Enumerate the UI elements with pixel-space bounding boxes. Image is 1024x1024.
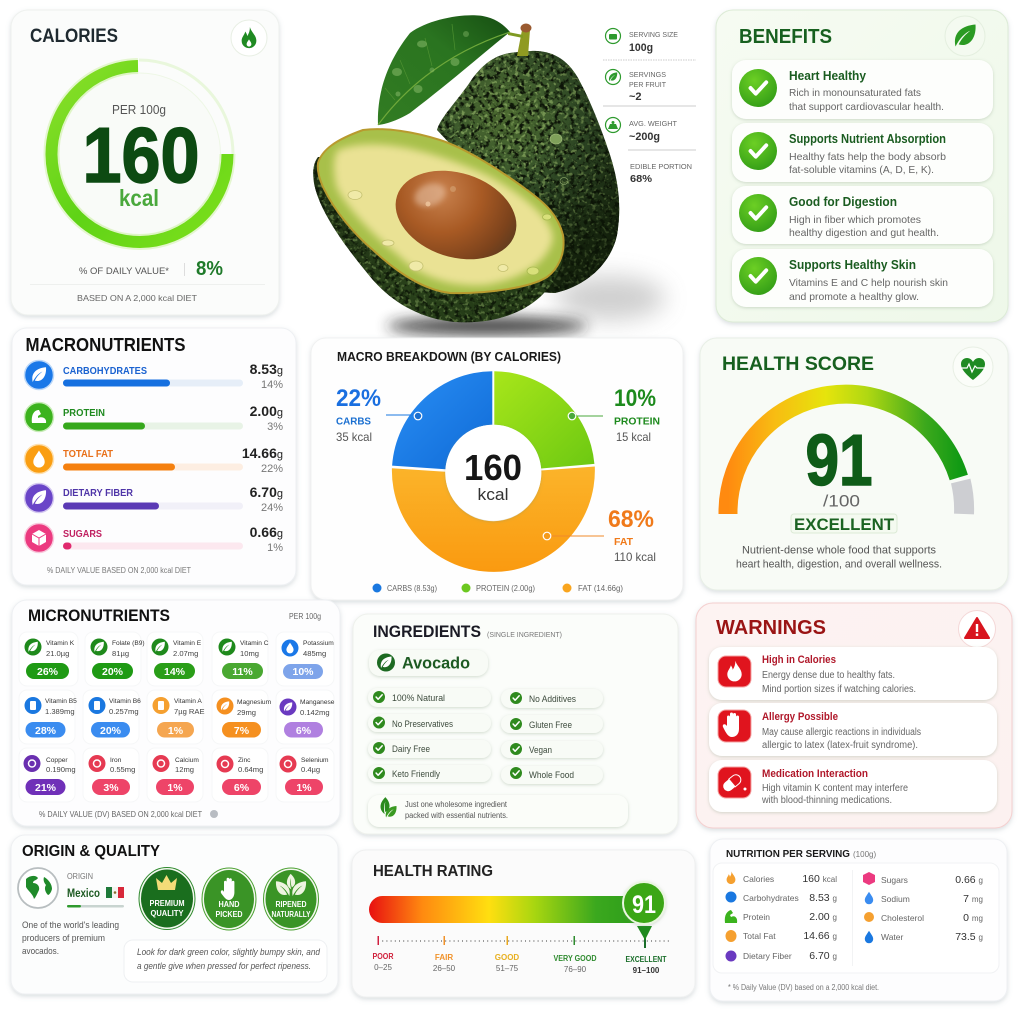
score description: Nutrient-dense whole food that supports	[742, 545, 936, 557]
row: protein: 2.00g	[250, 403, 283, 419]
hero avocado illustration	[313, 15, 665, 335]
origin description: One of the world's leading	[22, 920, 119, 931]
nutrient: vitamin c	[212, 632, 269, 686]
nutrient: copper: 21%	[35, 782, 57, 794]
row: total fat: TOTAL FAT	[63, 449, 113, 460]
score value: 91	[806, 421, 872, 501]
scale label: excellent: EXCELLENT	[626, 955, 667, 964]
callout: carbs: CARBS	[336, 416, 371, 428]
callout: protein: 10%	[614, 385, 656, 412]
nutrient: iron: Iron	[110, 757, 122, 764]
nutrient: magnesium	[212, 690, 272, 744]
row: dietary fiber: DIETARY FIBER	[63, 488, 134, 499]
nutrient: vitamin a: 1%	[168, 725, 184, 737]
chip: no additives	[501, 689, 603, 708]
nutrient: vitamin k: 26%	[37, 666, 59, 678]
row: sugars: 1%	[267, 542, 283, 554]
benefit: skin	[732, 249, 993, 307]
avocado seed	[384, 156, 528, 274]
fact: serving size	[606, 28, 678, 54]
nutrient: vitamin b5: 1.389mg	[45, 707, 75, 716]
callout: fat	[543, 506, 656, 564]
row: protein: 2.00 g	[809, 911, 837, 923]
calorie value: 160	[82, 111, 200, 199]
nutrient: vitamin e	[147, 632, 203, 686]
row: total fat: Total Fat	[743, 931, 776, 941]
row: calories: Calories	[743, 874, 774, 884]
whole avocado	[437, 51, 619, 293]
panel: macro breakdown	[311, 338, 683, 600]
chip: no preservatives	[368, 714, 491, 732]
ingredient note: packed with essential nutrients.	[405, 811, 508, 820]
nutrient: vitamin e: 2.07mg	[173, 649, 198, 658]
warning: medication interaction	[709, 760, 997, 812]
icon: heart	[953, 347, 993, 387]
footnote: % DAILY VALUE BASED ON 2,000 kcal DIET	[47, 566, 191, 575]
nutrient: manganese	[276, 690, 335, 744]
icon: leaf	[945, 16, 985, 56]
footnote: * % Daily Value (DV) based on a 2,000 kcal diet.	[728, 983, 879, 992]
nutrient: vitamin c: 10mg	[240, 649, 259, 658]
fact: serving size: SERVING SIZE	[629, 30, 678, 39]
heading: benefits: BENEFITS	[739, 26, 832, 48]
scale label: poor	[372, 952, 394, 972]
halved avocado flesh	[318, 129, 564, 293]
chip: vegan	[501, 741, 603, 758]
nutrition table	[713, 863, 999, 973]
daily value: 8%	[196, 258, 223, 280]
benefit: heart healthy: Heart Healthy	[789, 69, 866, 83]
panel: warnings	[696, 603, 1012, 828]
nutrient: iron: 0.55mg	[110, 765, 135, 774]
nutrient: zinc: 6%	[234, 782, 250, 794]
row: carbohydrates	[24, 360, 283, 391]
row: protein	[24, 402, 283, 433]
row: sodium	[865, 892, 983, 905]
scale label: poor: POOR	[372, 952, 394, 961]
benefit: digestion: Good for Digestion	[789, 195, 897, 209]
heading: origin: ORIGIN & QUALITY	[22, 843, 161, 860]
benefit: heart healthy: that support cardiovascular health.	[789, 101, 944, 113]
avocado ingredient pill: Avocado	[402, 654, 470, 672]
serving facts column	[603, 28, 696, 185]
row: cholesterol	[864, 912, 983, 924]
badge: hand picked: HAND	[218, 900, 240, 909]
rating scale bar	[369, 896, 636, 923]
badge: ripened naturally: NATURALLY	[272, 910, 311, 919]
nutrient: vitamin a: 7µg RAE	[174, 707, 205, 716]
fact: edible portion: 68%	[630, 173, 653, 185]
benefit: nutrient absorption: Healthy fats help the body absorb	[789, 151, 946, 163]
benefit: digestion	[732, 186, 993, 244]
scale label: good	[495, 953, 519, 973]
warning: medication interaction: High vitamin K content may interfere	[762, 783, 908, 794]
callout: protein	[568, 385, 660, 444]
callout: carbs	[336, 385, 422, 444]
callout: carbs: 35 kcal	[336, 430, 372, 444]
row: protein: 3%	[267, 421, 283, 433]
fact: edible portion: EDIBLE PORTION	[630, 162, 692, 171]
origin text: ORIGIN	[67, 872, 93, 881]
chip: keto friendly	[368, 765, 491, 782]
legend: FAT (14.66g)	[578, 584, 623, 593]
nutrient: zinc	[212, 748, 268, 802]
row: sugars	[24, 524, 283, 554]
panel: nutrition per serving	[710, 839, 1007, 1001]
nutrient: calcium: 12mg	[175, 765, 194, 774]
ticks	[378, 936, 672, 948]
score value: EXCELLENT	[794, 515, 895, 534]
scale label: excellent: 91–100	[633, 966, 660, 975]
nutrient: vitamin k: Vitamin K	[46, 640, 75, 647]
row: carbohydrates: 14%	[261, 379, 283, 391]
nutrient: selenium: 0.4µg	[301, 765, 320, 774]
origin description: producers of premium	[22, 933, 105, 944]
panel: macronutrients	[12, 328, 296, 585]
fact: average weight: AVG. WEIGHT	[629, 119, 677, 128]
heading: micronutrients: MICRONUTRIENTS	[28, 606, 170, 625]
row: dietary fiber: 6.70g	[250, 484, 283, 500]
heading: macronutrients: MACRONUTRIENTS	[26, 335, 186, 355]
nutrient: vitamin b5: Vitamin B5	[45, 698, 77, 705]
nutrient: vitamin a	[147, 690, 205, 744]
chip: no preservatives: No Preservatives	[392, 719, 453, 730]
scale label: very good: 76–90	[564, 965, 587, 974]
callout: fat: FAT	[614, 536, 634, 548]
benefit: skin: Supports Healthy Skin	[789, 258, 916, 272]
row: protein: Protein	[743, 912, 770, 922]
nutrient: vitamin b6: 20%	[100, 725, 122, 737]
warning: high in calories	[709, 647, 997, 700]
warning: high in calories: Mind portion sizes if watching calories.	[762, 684, 916, 695]
row: total fat: 14.66g	[242, 445, 283, 461]
heading: nutrition per serving: (100g)	[853, 850, 876, 859]
heading: ingredients: INGREDIENTS	[373, 622, 481, 641]
chip: dairy free: Dairy Free	[392, 744, 430, 755]
panel: micronutrients	[12, 600, 340, 826]
nutrient: vitamin k: 21.0µg	[46, 649, 69, 658]
row: cholesterol: Cholesterol	[881, 913, 924, 923]
ripeness tip: a gentle give when pressed for perfect ripeness.	[137, 961, 311, 972]
warning: allergy possible	[709, 703, 997, 756]
badge: hand picked: PICKED	[216, 910, 243, 919]
row: carbohydrates	[726, 892, 837, 904]
nutrient: iron	[83, 748, 139, 802]
nutrient: vitamin a: Vitamin A	[174, 698, 202, 705]
row: sugars: 0.66 g	[955, 874, 983, 886]
chip: dairy free	[368, 740, 491, 758]
fact: serving size: 100g	[629, 42, 653, 54]
nutrient: vitamin c: 11%	[232, 666, 253, 678]
warning: high in calories: High in Calories	[762, 654, 836, 666]
chip: gluten free	[501, 715, 603, 733]
icon: warning triangle	[958, 610, 996, 648]
row: sugars: Sugars	[881, 875, 908, 885]
fact: servings per fruit: PER FRUIT	[629, 80, 666, 89]
benefit: heart healthy	[732, 60, 993, 119]
warning: allergy possible: Allergy Possible	[762, 711, 838, 723]
ripeness tip: Look for dark green color, slightly bumpy skin, and	[137, 947, 321, 958]
row: sodium: 7 mg	[963, 893, 983, 905]
icon: flame	[231, 20, 267, 56]
fact: servings per fruit	[606, 70, 666, 103]
leaf	[378, 15, 510, 125]
row: carbohydrates: 8.53 g	[809, 892, 837, 904]
footnote: BASED ON A 2,000 kcal DIET	[77, 293, 197, 303]
heading: ingredients	[373, 622, 562, 641]
row: carbohydrates: Carbohydrates	[743, 893, 799, 903]
nutrient: folate: 81µg	[112, 649, 129, 658]
nutrient: zinc: 0.64mg	[238, 765, 263, 774]
benefit: skin: Vitamins E and C help nourish skin	[789, 277, 948, 289]
row: carbohydrates: CARBOHYDRATES	[63, 366, 147, 377]
heading: nutrition per serving: NUTRITION PER SERVING	[726, 848, 850, 860]
row: water: 73.5 g	[955, 931, 983, 943]
row: dietary fiber: 24%	[261, 502, 283, 514]
badge: ripened naturally	[264, 868, 318, 930]
panel: ingredients	[353, 614, 678, 834]
row: total fat	[726, 930, 837, 942]
nutrient: selenium	[276, 748, 334, 802]
donut chart	[392, 371, 595, 572]
nutrient: vitamin b5: 28%	[35, 725, 57, 737]
calorie value: PER 100g	[112, 102, 166, 117]
nutrient: potassium: 10%	[292, 666, 314, 678]
nutrient: folate	[85, 632, 145, 686]
badge: premium quality: QUALITY	[150, 909, 184, 918]
row: dietary fiber	[24, 484, 283, 514]
heading: calories: CALORIES	[30, 26, 118, 47]
scale label: poor: 0–25	[374, 963, 392, 972]
avocado ingredient pill	[369, 650, 488, 676]
score description: heart health, digestion, and overall wellness.	[736, 559, 942, 571]
chip: no additives: No Additives	[529, 694, 576, 705]
row: protein: PROTEIN	[63, 408, 105, 419]
legend: PROTEIN (2.00g)	[476, 584, 535, 593]
row: dietary fiber: 6.70 g	[809, 950, 837, 962]
scale label: fair: FAIR	[435, 953, 453, 962]
chip: 100% natural	[368, 688, 491, 707]
nutrient: copper	[19, 748, 76, 802]
nutrient: selenium: Selenium	[301, 757, 329, 764]
nutrient: folate: 20%	[102, 666, 124, 678]
icon: globe	[18, 868, 58, 908]
row: dietary fiber	[726, 950, 837, 962]
daily value	[79, 258, 223, 280]
warning: high in calories: Energy dense due to healthy fats.	[762, 670, 895, 681]
row: total fat: 22%	[261, 463, 283, 475]
daily value: % OF DAILY VALUE*	[79, 266, 169, 277]
footnote with info icon: % DAILY VALUE (DV) BASED ON 2,000 kcal DIET	[39, 810, 202, 819]
donut chart: 160	[464, 447, 522, 488]
score marker	[623, 882, 665, 940]
benefit: skin: and promote a healthy glow.	[789, 291, 919, 303]
badge: premium quality: PREMIUM	[150, 899, 185, 908]
nutrient: magnesium: Magnesium	[237, 699, 272, 706]
row: protein	[725, 910, 837, 923]
chip: whole food: Whole Food	[529, 770, 574, 781]
row: sodium: Sodium	[881, 894, 910, 904]
benefit: nutrient absorption	[732, 123, 993, 182]
heading: health score: HEALTH SCORE	[722, 353, 874, 375]
nutrient: manganese: Manganese	[300, 699, 335, 706]
ripeness tip	[124, 940, 327, 982]
panel: health rating	[352, 850, 695, 997]
heading: health rating: HEALTH RATING	[373, 863, 493, 880]
row: total fat	[24, 444, 283, 475]
origin text	[67, 872, 124, 908]
stem	[508, 24, 532, 56]
nutrient: manganese: 0.142mg	[300, 708, 330, 717]
row: water: Water	[881, 932, 904, 942]
nutrient: manganese: 6%	[296, 725, 312, 737]
scale label: very good: VERY GOOD	[554, 954, 597, 963]
scale label: good: GOOD	[495, 953, 519, 962]
row: total fat: 14.66 g	[803, 930, 837, 942]
donut chart: kcal	[478, 485, 508, 504]
ingredient note: Just one wholesome ingredient	[405, 800, 508, 809]
heading: macro breakdown: MACRO BREAKDOWN (BY CALORIES)	[337, 349, 561, 364]
fact: average weight	[606, 118, 677, 143]
row: sugars	[863, 872, 983, 886]
callout: fat: 68%	[608, 506, 654, 533]
nutrient: copper: Copper	[46, 757, 68, 764]
fact: average weight: ~200g	[629, 131, 660, 143]
nutrient: vitamin c: Vitamin C	[240, 640, 269, 647]
nutrient: potassium: Potassium	[303, 640, 334, 647]
benefit: digestion: High in fiber which promotes	[789, 214, 921, 226]
score description	[736, 545, 942, 571]
row: sugars: SUGARS	[63, 529, 102, 540]
warning: medication interaction: Medication Interaction	[762, 768, 868, 780]
benefit: digestion: healthy digestion and gut health.	[789, 227, 939, 239]
chip: whole food	[501, 766, 603, 784]
chip: gluten free: Gluten Free	[529, 720, 572, 731]
origin description	[22, 920, 119, 957]
callout: protein: 15 kcal	[616, 430, 651, 444]
nutrient: calcium	[147, 748, 203, 802]
nutrient: vitamin b6	[83, 690, 141, 744]
score value	[791, 421, 897, 534]
panel: origin and quality	[11, 835, 338, 994]
warning: allergy possible: allergic to latex (latex-fruit syndrome).	[762, 740, 918, 751]
chip: keto friendly: Keto Friendly	[392, 769, 440, 780]
fact: edible portion	[630, 162, 692, 185]
per 100g note: PER 100g	[289, 611, 321, 621]
callout: protein: PROTEIN	[614, 416, 660, 428]
badge: premium quality	[139, 868, 195, 930]
nutrient: zinc: Zinc	[238, 757, 251, 764]
panel: benefits	[716, 10, 1008, 322]
chip: vegan: Vegan	[529, 745, 552, 756]
callout: carbs: 22%	[336, 385, 381, 412]
row: cholesterol: 0 mg	[963, 912, 983, 924]
fact: servings per fruit: SERVINGS	[629, 70, 666, 79]
heading: ingredients: (SINGLE INGREDIENT)	[487, 630, 562, 639]
badge: ripened naturally: RIPENED	[276, 900, 307, 909]
nutrient: selenium: 1%	[296, 782, 312, 794]
row: calories: 160 kcal	[802, 873, 837, 885]
fact: servings per fruit: ~2	[629, 91, 642, 103]
nutrient: vitamin e: Vitamin E	[173, 640, 202, 647]
origin description: avocados.	[22, 946, 59, 957]
chip: 100% natural: 100% Natural	[392, 693, 445, 704]
origin text: Mexico	[67, 888, 100, 900]
nutrient: vitamin e: 14%	[164, 666, 186, 678]
scale label: fair: 26–50	[433, 964, 456, 973]
benefit: heart healthy: Rich in monounsaturated fats	[789, 87, 921, 99]
gauge	[728, 394, 964, 514]
nutrient: calcium: Calcium	[175, 757, 199, 764]
nutrient: potassium: 485mg	[303, 649, 326, 658]
warning: medication interaction: with blood-thinning medications.	[761, 795, 892, 806]
warning: allergy possible: May cause allergic reactions in individuals	[762, 727, 921, 738]
nutrient: folate: Folate (B9)	[112, 640, 145, 647]
halved avocado skin	[313, 157, 565, 322]
nutrient: vitamin k	[19, 632, 78, 686]
badge: hand picked	[202, 868, 256, 930]
scale label: good: 51–75	[496, 964, 519, 973]
nutrient: iron: 3%	[103, 782, 119, 794]
benefit: nutrient absorption: fat-soluble vitamins (A, D, E, K).	[789, 164, 934, 176]
nutrient: potassium	[276, 632, 334, 686]
calorie ring chart	[52, 60, 233, 242]
panel: calories	[11, 10, 279, 315]
nutrient: vitamin b6: Vitamin B6	[109, 698, 141, 705]
row: water	[865, 931, 983, 943]
nutrient: magnesium: 29mg	[237, 708, 256, 717]
calorie value: kcal	[119, 185, 159, 211]
row: sugars: 0.66g	[250, 524, 283, 540]
row: calories	[727, 871, 837, 885]
nutrient: vitamin b5	[19, 690, 77, 744]
legend	[372, 584, 623, 593]
score marker: 91	[632, 891, 656, 919]
benefit: nutrient absorption: Supports Nutrient Absorption	[789, 132, 946, 146]
row: dietary fiber: Dietary Fiber	[743, 951, 792, 961]
callout: fat: 110 kcal	[614, 550, 656, 564]
ingredient note	[368, 795, 628, 827]
legend: CARBS (8.53g)	[387, 584, 437, 593]
nutrient: magnesium: 7%	[234, 725, 250, 737]
nutrient: copper: 0.190mg	[46, 765, 76, 774]
nutrient: vitamin b6: 0.257mg	[109, 707, 139, 716]
scale label: fair	[433, 953, 456, 973]
scale label: very good	[554, 954, 597, 974]
panel: health score	[700, 338, 1008, 590]
nutrient: calcium: 1%	[167, 782, 183, 794]
score value: /100	[823, 492, 860, 511]
heading: warnings: WARNINGS	[716, 617, 826, 639]
scale label: excellent	[626, 955, 667, 975]
row: carbohydrates: 8.53g	[250, 361, 283, 377]
